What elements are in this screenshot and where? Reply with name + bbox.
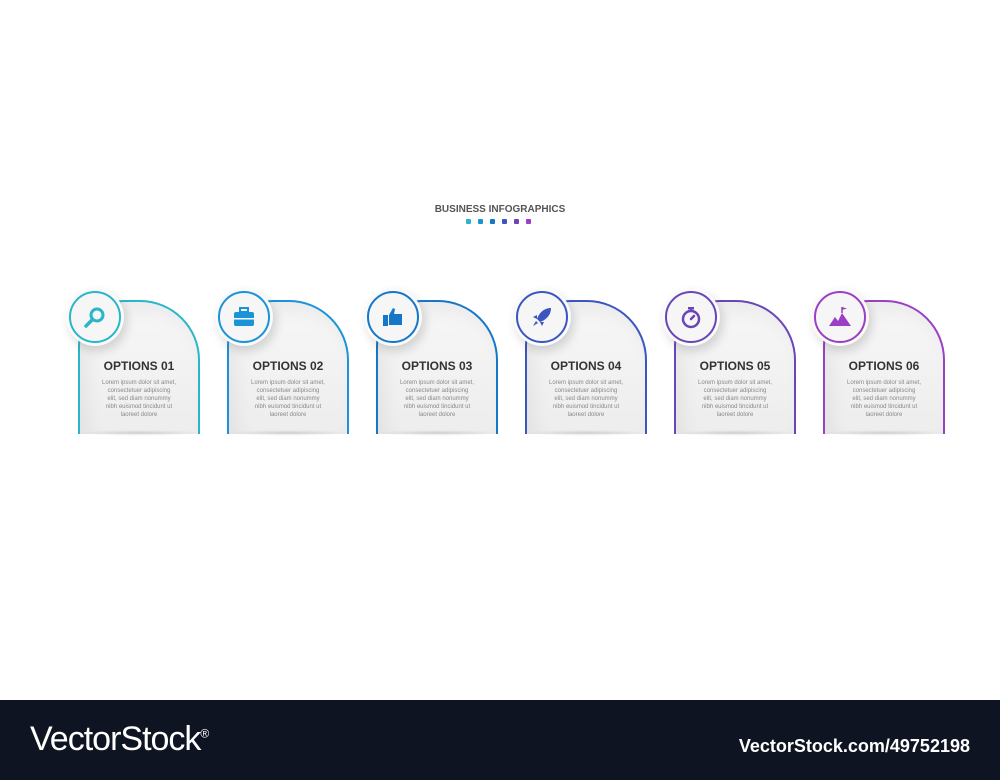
panel: option 02: Lorem ipsum dolor sit amet, [251, 380, 325, 386]
panel: option 02: consectetuer adipiscing [257, 388, 319, 394]
panel: option 03: OPTIONS 03 [402, 359, 472, 373]
title: BUSINESS INFOGRAPHICS [435, 204, 565, 215]
panel: option 04: elit, sed diam nonummy [554, 396, 618, 402]
panel: option 05: elit, sed diam nonummy [703, 396, 767, 402]
panel: option 06 [823, 300, 945, 434]
footer bar [0, 700, 1000, 780]
icon: mountain flag [811, 288, 869, 346]
color dots [466, 219, 531, 224]
panel: option 01: Lorem ipsum dolor sit amet, [102, 380, 176, 386]
panel: option 01: consectetuer adipiscing [108, 388, 170, 394]
panel: option 04: laoreet dolore [568, 412, 604, 418]
panel: option 03: laoreet dolore [419, 412, 455, 418]
panel: option 04: Lorem ipsum dolor sit amet, [549, 380, 623, 386]
panel: option 05 [674, 300, 796, 434]
panel: option 02: OPTIONS 02 [253, 359, 323, 373]
panel: option 02 [227, 300, 349, 434]
panel: option 06: laoreet dolore [866, 412, 902, 418]
panel: option 01: OPTIONS 01 [104, 359, 174, 373]
panel: option 03: Lorem ipsum dolor sit amet, [400, 380, 474, 386]
panel: option 04 [525, 300, 647, 434]
panel: option 05: nibh euismod tincidunt ut [702, 404, 768, 410]
panel: option 06: consectetuer adipiscing [853, 388, 915, 394]
panel: option 04: nibh euismod tincidunt ut [553, 404, 619, 410]
panel: option 05: laoreet dolore [717, 412, 753, 418]
panel: option 05: Lorem ipsum dolor sit amet, [698, 380, 772, 386]
panel: option 06: Lorem ipsum dolor sit amet, [847, 380, 921, 386]
panel: option 03 [376, 300, 498, 434]
icon: rocket [513, 288, 571, 346]
panel: option 02: elit, sed diam nonummy [256, 396, 320, 402]
panel: option 06: nibh euismod tincidunt ut [851, 404, 917, 410]
panel: option 01: nibh euismod tincidunt ut [106, 404, 172, 410]
panel: option 03: elit, sed diam nonummy [405, 396, 469, 402]
panel: option 02: nibh euismod tincidunt ut [255, 404, 321, 410]
icon: thumbs up [364, 288, 422, 346]
footer id: VectorStock.com/49752198 [739, 736, 970, 756]
panel: option 06: OPTIONS 06 [849, 359, 919, 373]
footer logo: VectorStock® [30, 720, 208, 758]
panel: option 06: elit, sed diam nonummy [852, 396, 916, 402]
panel: option 03: nibh euismod tincidunt ut [404, 404, 470, 410]
panel: option 01: laoreet dolore [121, 412, 157, 418]
panel: option 04: OPTIONS 04 [551, 359, 621, 373]
icon: stopwatch [662, 288, 720, 346]
panel: option 05: consectetuer adipiscing [704, 388, 766, 394]
panel: option 01 [78, 300, 200, 434]
panel: option 04: consectetuer adipiscing [555, 388, 617, 394]
panel: option 05: OPTIONS 05 [700, 359, 770, 373]
panel: option 01: elit, sed diam nonummy [107, 396, 171, 402]
icon: magnifier [66, 288, 124, 346]
panel: option 03: consectetuer adipiscing [406, 388, 468, 394]
icon: briefcase [215, 288, 273, 346]
panel: option 02: laoreet dolore [270, 412, 306, 418]
